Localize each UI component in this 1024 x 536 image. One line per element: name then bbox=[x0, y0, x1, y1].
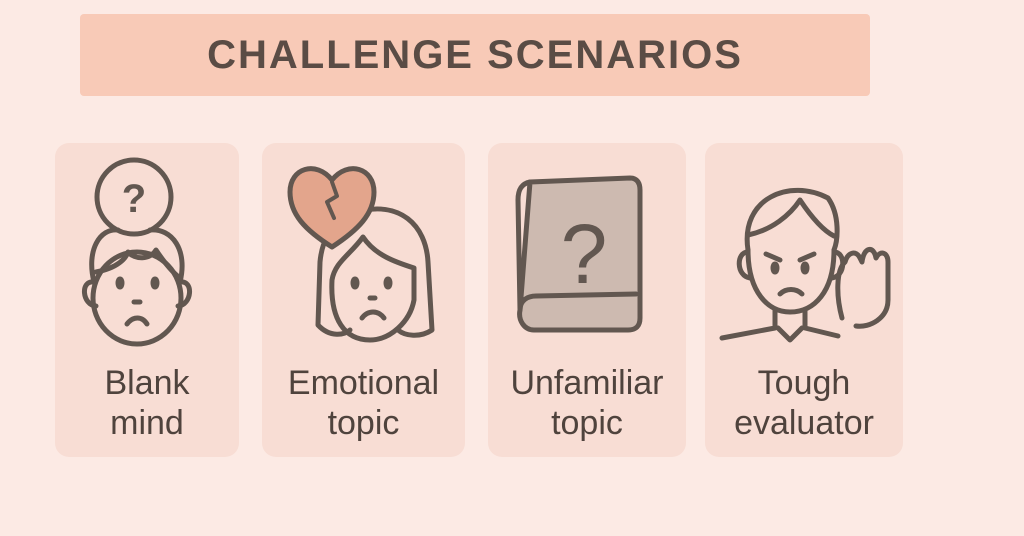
icon: confused boy: ? bbox=[122, 177, 146, 221]
icon: confused boy bbox=[84, 160, 190, 344]
icon: book with question mark: ? bbox=[561, 207, 607, 301]
panel: unfamiliar topic: Unfamiliar bbox=[510, 364, 664, 402]
icon: heartbroken woman bbox=[290, 169, 432, 340]
panel: blank mind: Blank bbox=[104, 364, 190, 402]
panel: emotional topic: Emotional bbox=[288, 364, 439, 402]
icon: stern evaluator with raised hand bbox=[722, 190, 888, 340]
panel: blank mind: mind bbox=[110, 404, 184, 442]
panel: tough evaluator: evaluator bbox=[734, 404, 874, 442]
panel: emotional topic bbox=[262, 143, 465, 457]
icon: book with question mark bbox=[518, 178, 640, 330]
panel: tough evaluator bbox=[705, 143, 903, 457]
panel: blank mind bbox=[55, 143, 239, 457]
panel: unfamiliar topic: topic bbox=[551, 404, 623, 442]
title banner: CHALLENGE SCENARIOS bbox=[207, 32, 743, 76]
panel: unfamiliar topic bbox=[488, 143, 686, 457]
title banner bbox=[80, 14, 870, 96]
panel: tough evaluator: Tough bbox=[758, 364, 850, 402]
panel: emotional topic: topic bbox=[328, 404, 399, 442]
